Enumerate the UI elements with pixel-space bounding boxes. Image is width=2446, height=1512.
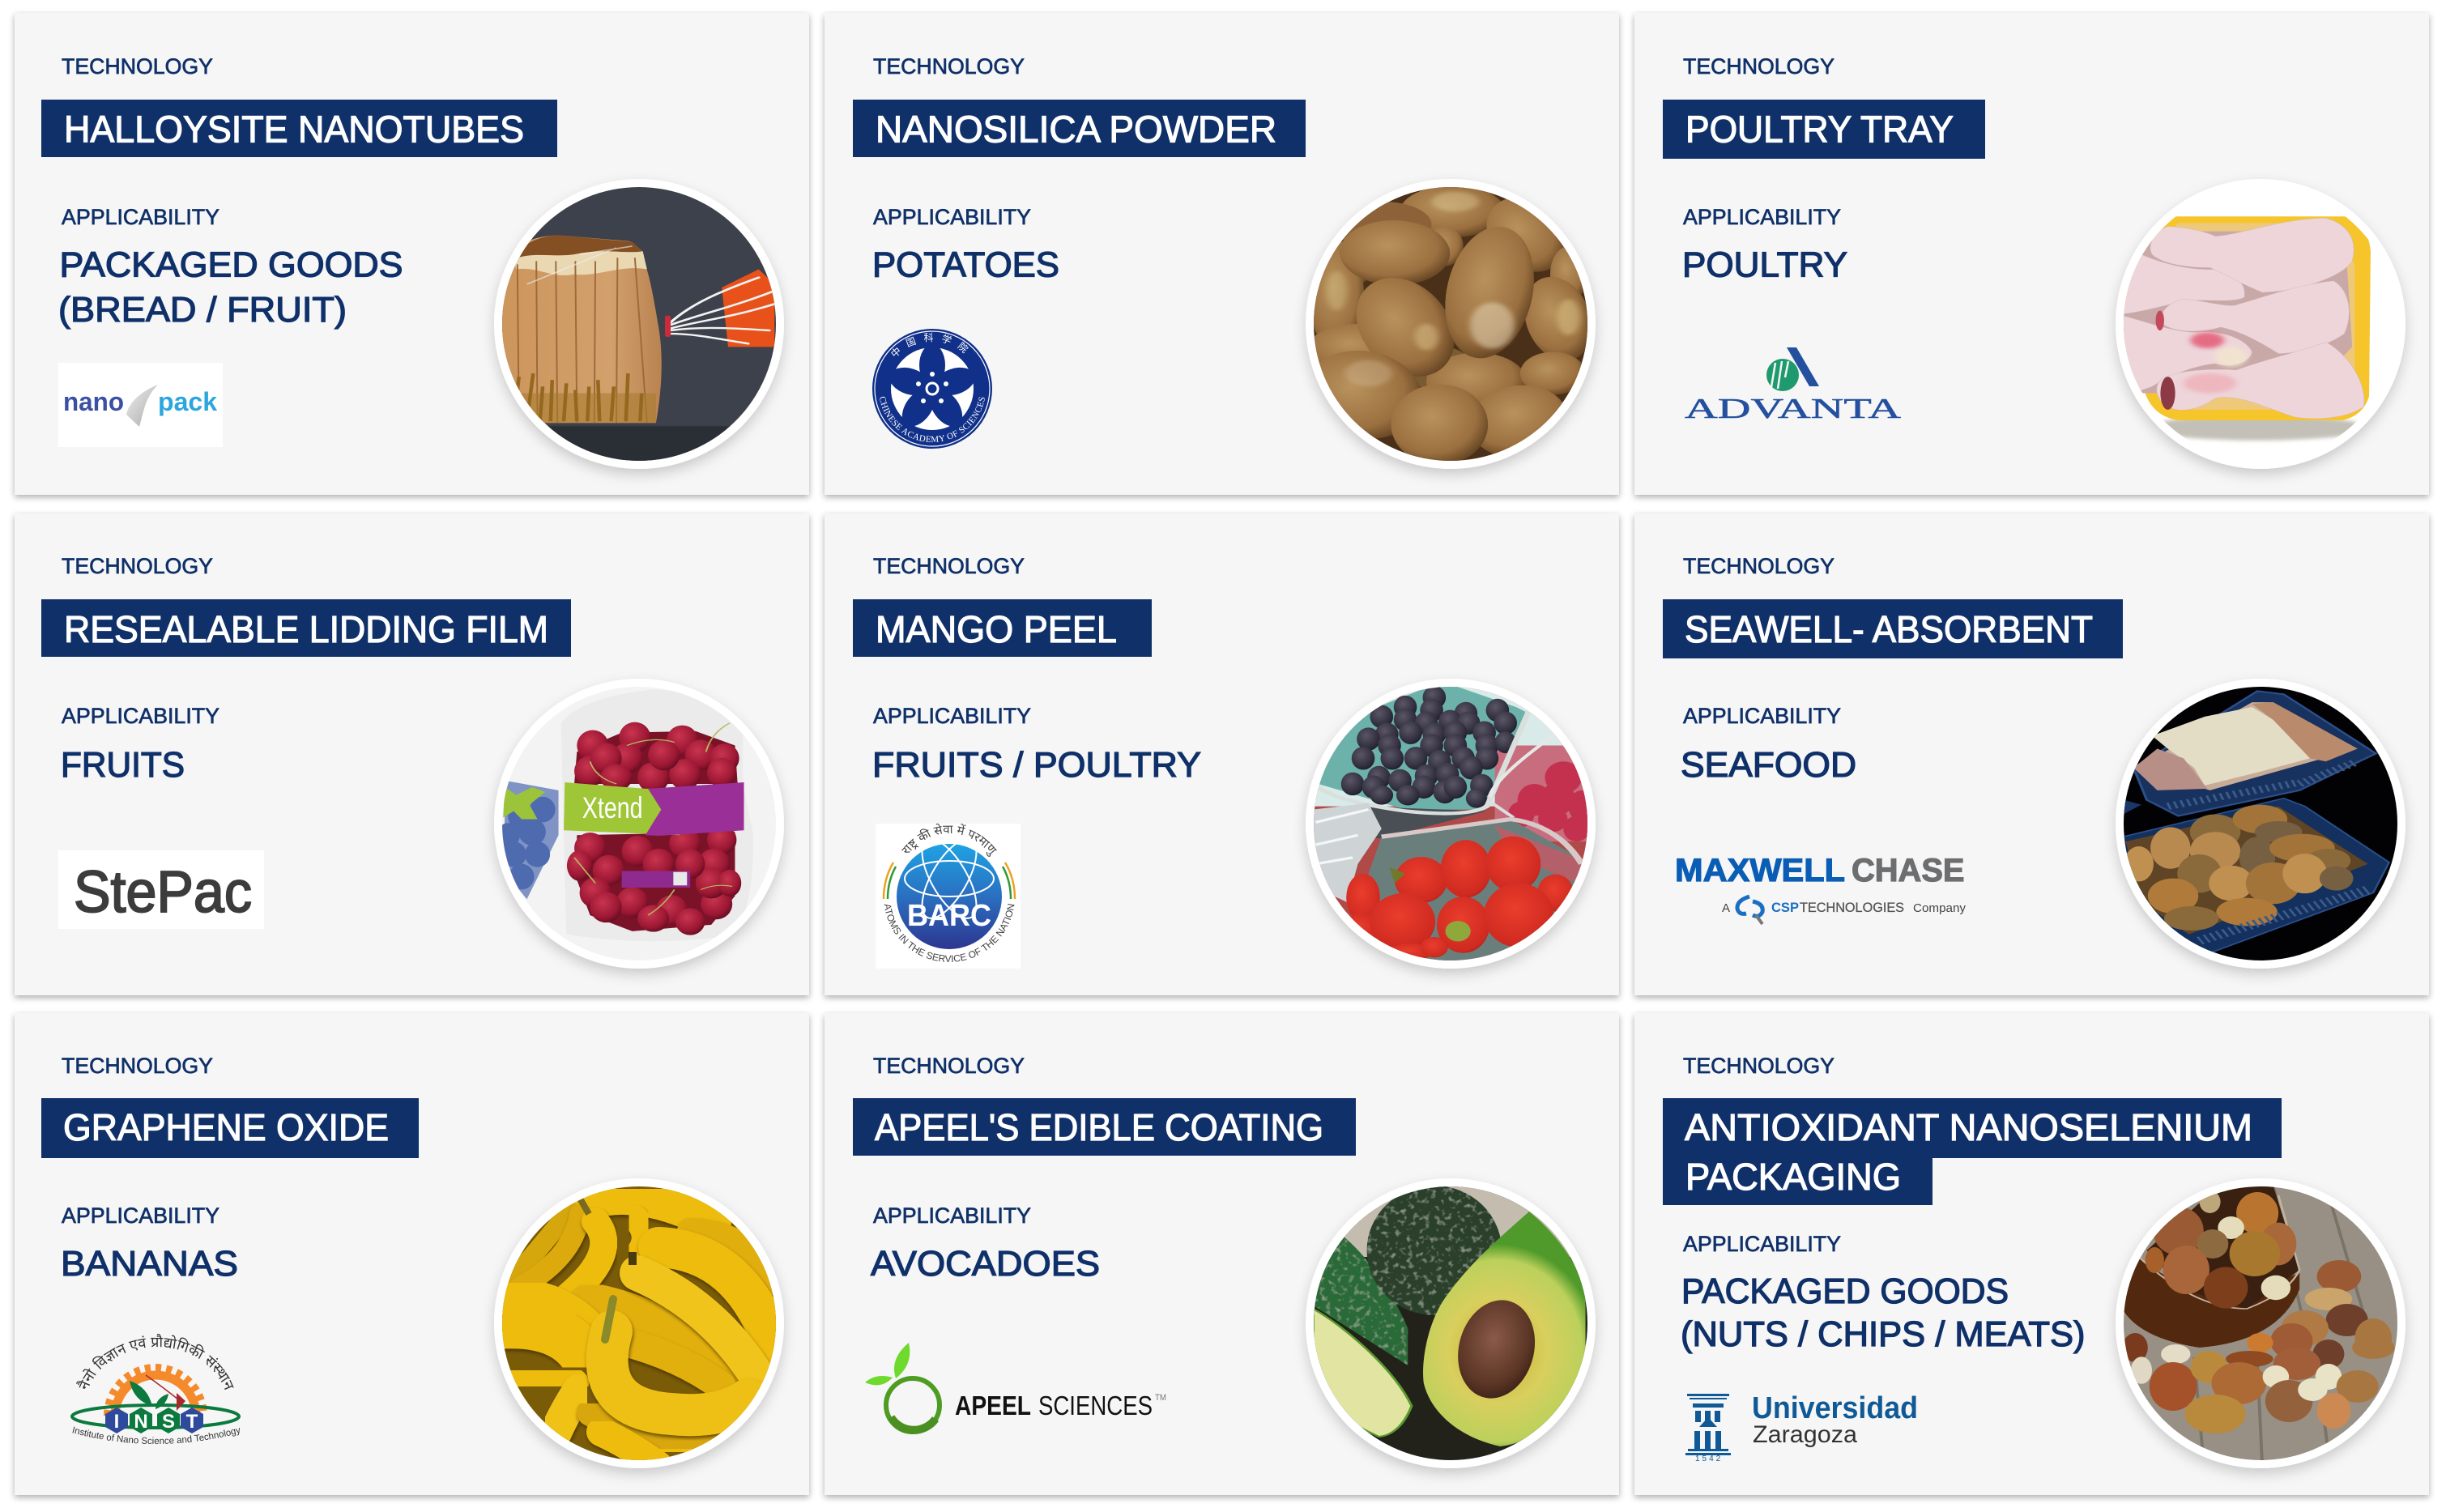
applicability value: packaged goods: PACKAGED GOODS xyxy=(1681,1271,2009,1311)
logo: inst: Institute of Nano Science and Technology xyxy=(72,1427,240,1445)
heading: apeel's edible coating: APEEL'S EDIBLE COATING xyxy=(875,1106,1323,1148)
applicability value: potatoes: POTATOES xyxy=(872,245,1059,285)
logo: universidad zaragoza: Zaragoza xyxy=(1753,1421,1857,1448)
panel: antioxidant nanoselenium packaging xyxy=(1634,1013,2429,1495)
applicability value: seafood: SEAFOOD xyxy=(1681,745,1856,785)
logo: chinese academy of sciences xyxy=(872,329,992,449)
photo: seafood in blue trays xyxy=(2110,679,2411,980)
applicability value: packaged goods: PACKAGED GOODS xyxy=(60,245,403,285)
logo: advanta: ADVANTA xyxy=(1685,393,1902,424)
heading: apeel's edible coating xyxy=(853,1098,1356,1156)
photo: sliced bread in bag xyxy=(488,179,790,480)
label: technology: TECHNOLOGY xyxy=(1683,554,1834,578)
logo: universidad zaragoza xyxy=(1685,1391,1918,1463)
heading: poultry tray: POULTRY TRAY xyxy=(1685,109,1954,151)
heading: seawell absorbent: SEAWELL- ABSORBENT xyxy=(1685,608,2093,650)
label: technology: TECHNOLOGY xyxy=(1683,54,1834,79)
panel: mango peel xyxy=(820,512,1623,1002)
logo: inst xyxy=(70,1334,241,1445)
applicability value: packaged goods: (BREAD / FRUIT) xyxy=(58,290,347,330)
logo: maxwell chase: CSP xyxy=(1771,900,1799,915)
logo: stepac: StePac xyxy=(74,860,252,925)
logo: nanopack: nano xyxy=(63,387,124,416)
heading: graphene oxide: GRAPHENE OXIDE xyxy=(63,1106,389,1148)
label: applicability: APPLICABILITY xyxy=(62,1203,219,1228)
photo: cherries in xtend bag xyxy=(488,679,790,980)
photo: chicken drumsticks on yellow tray xyxy=(2116,179,2406,469)
applicability value: fruits: FRUITS xyxy=(61,745,185,785)
heading: resealable lidding film: RESEALABLE LIDDING FILM xyxy=(64,608,548,650)
logo: apeel sciences: APEEL xyxy=(955,1391,1031,1420)
applicability value: bananas: BANANAS xyxy=(61,1244,238,1284)
logo: barc xyxy=(876,824,1021,969)
panel: seawell absorbent xyxy=(1634,513,2429,995)
label: applicability: APPLICABILITY xyxy=(62,205,219,229)
logo: maxwell chase: CHASE xyxy=(1852,853,1965,888)
heading: graphene oxide xyxy=(41,1098,419,1158)
panel: apeel's edible coating xyxy=(825,1013,1619,1495)
heading: antioxidant nanoselenium packaging: ANTIOXIDANT NANOSELENIUM xyxy=(1685,1106,2252,1148)
logo: barc: ATOMS IN THE SERVICE OF THE NATION xyxy=(884,904,1014,962)
photo: avocados xyxy=(1300,1178,1601,1480)
heading: nanosilica powder xyxy=(853,100,1306,157)
applicability value: fruits / poultry: FRUITS / POULTRY xyxy=(872,745,1201,785)
label: applicability: APPLICABILITY xyxy=(873,1203,1031,1228)
label: technology: TECHNOLOGY xyxy=(62,54,213,79)
applicability value: packaged goods xyxy=(58,245,403,330)
photo: bananas xyxy=(494,1178,784,1468)
logo: maxwell chase: MAXWELL xyxy=(1675,853,1845,888)
logo: maxwell chase: Company xyxy=(1913,901,1966,915)
logo: inst: N xyxy=(134,1411,148,1433)
heading: halloysite nanotubes: HALLOYSITE NANOTUBES xyxy=(64,109,524,151)
logo: inst: T xyxy=(186,1411,198,1433)
applicability value: packaged goods: (NUTS / CHIPS / MEATS) xyxy=(1681,1314,2085,1354)
logo: maxwell chase xyxy=(1675,853,1966,924)
logo: inst: नैनो विज्ञान एवं प्रौद्योगिकी संस्थान xyxy=(76,1334,234,1390)
logo: apeel sciences xyxy=(865,1343,1166,1432)
heading: halloysite nanotubes xyxy=(41,100,557,157)
logo: inst: S xyxy=(162,1411,175,1433)
label: technology: TECHNOLOGY xyxy=(62,554,213,578)
heading: seawell absorbent xyxy=(1663,599,2123,658)
label: technology: TECHNOLOGY xyxy=(873,54,1025,79)
label: technology: TECHNOLOGY xyxy=(873,1054,1025,1078)
logo: inst: I xyxy=(114,1411,119,1433)
logo: universidad zaragoza: Universidad xyxy=(1752,1391,1918,1425)
heading: mango peel xyxy=(853,599,1152,657)
logo: chinese academy of sciences: 中国科学院 xyxy=(891,332,969,356)
panel: nanosilica powder xyxy=(820,11,1623,501)
label: xtend brand text: Xtend xyxy=(582,790,643,824)
photo: potatoes xyxy=(1300,179,1601,480)
applicability value: packaged goods xyxy=(1681,1271,2085,1354)
heading: poultry tray xyxy=(1663,100,1985,159)
applicability value: avocadoes: AVOCADOES xyxy=(871,1244,1100,1284)
label: applicability: APPLICABILITY xyxy=(1683,1232,1841,1256)
label: technology: TECHNOLOGY xyxy=(62,1054,213,1078)
panel: halloysite nanotubes xyxy=(15,13,809,495)
logo: apeel sciences: SCIENCES xyxy=(1038,1391,1153,1420)
logo: barc: राष्ट्र की सेवा में परमाणु xyxy=(901,824,997,857)
label: applicability: APPLICABILITY xyxy=(1683,205,1841,229)
panel: graphene oxide xyxy=(11,1012,813,1501)
logo: maxwell chase: TECHNOLOGIES xyxy=(1800,900,1904,915)
logo: apeel sciences: TM xyxy=(1155,1393,1166,1403)
label: applicability: APPLICABILITY xyxy=(873,704,1031,728)
label: applicability: APPLICABILITY xyxy=(1683,704,1841,728)
logo: maxwell chase: A xyxy=(1722,901,1730,915)
logo: advanta xyxy=(1685,347,1902,424)
logo: barc: BARC xyxy=(907,899,991,933)
panel: poultry tray xyxy=(1634,13,2429,495)
heading: resealable lidding film xyxy=(41,599,571,657)
photo: berries in plastic trays xyxy=(1300,679,1601,980)
logo: universidad zaragoza: 1542 xyxy=(1695,1455,1723,1463)
heading: mango peel: MANGO PEEL xyxy=(876,608,1117,650)
logo: nanopack: pack xyxy=(158,387,217,416)
heading: antioxidant nanoselenium packaging xyxy=(1663,1098,2282,1205)
label: applicability: APPLICABILITY xyxy=(873,205,1031,229)
heading: antioxidant nanoselenium packaging: PACKAGING xyxy=(1685,1156,1901,1198)
photo: mixed nuts in wooden bowl xyxy=(2094,1166,2421,1490)
logo: nanopack xyxy=(58,363,223,447)
label: applicability: APPLICABILITY xyxy=(62,704,219,728)
label: technology: TECHNOLOGY xyxy=(1683,1054,1834,1078)
applicability value: poultry: POULTRY xyxy=(1682,245,1847,285)
heading: nanosilica powder: NANOSILICA POWDER xyxy=(876,109,1276,151)
label: technology: TECHNOLOGY xyxy=(873,554,1025,578)
panel: resealable lidding film xyxy=(15,513,809,995)
logo: chinese academy of sciences: CHINESE ACADEMY OF SCIENCES xyxy=(880,397,985,442)
